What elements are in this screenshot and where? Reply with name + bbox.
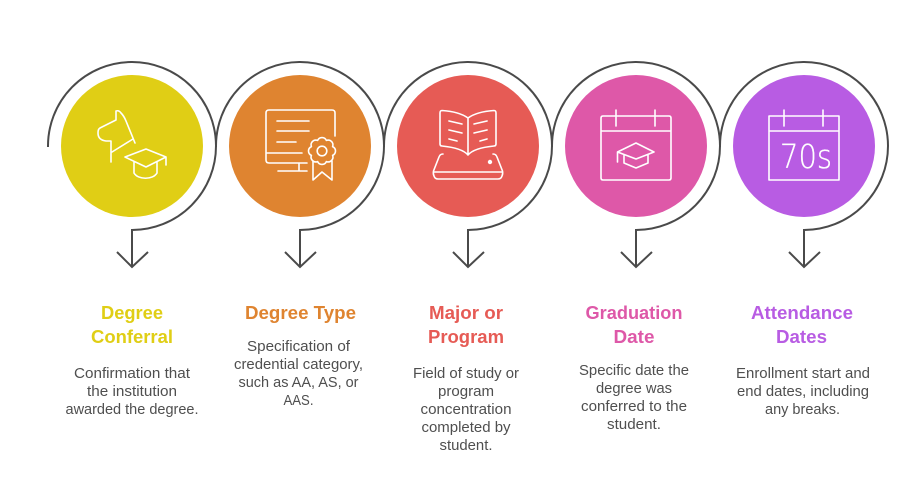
text: graduation date description: conferred to the <box>581 399 687 415</box>
arrow: circular connector <box>216 62 384 267</box>
text: attendance dates description: any breaks. <box>765 402 840 418</box>
panel: attendance dates <box>720 62 888 418</box>
text: graduation date description: degree was <box>596 381 672 397</box>
arrow: circular connector <box>552 62 720 267</box>
circle: red <box>397 75 539 217</box>
text: graduation date description: Specific date the <box>579 363 689 379</box>
panel: degree conferral <box>48 62 216 418</box>
heading: degree conferral: Degree <box>101 302 163 323</box>
text: major or program description: student. <box>440 438 492 454</box>
heading: degree conferral: Conferral <box>91 326 173 347</box>
text: degree conferral description: the institution <box>87 384 177 400</box>
icon: open book on scanner <box>433 110 503 179</box>
icon: certificate on monitor <box>266 110 335 180</box>
heading: graduation date: Graduation <box>586 302 682 323</box>
heading: degree type: Degree Type <box>245 302 356 323</box>
circle: orange <box>229 75 371 217</box>
text: graduation date description: student. <box>607 417 661 433</box>
text: major or program description: concentration <box>420 402 512 418</box>
circle: yellow <box>61 75 203 217</box>
text: degree type description: credential category, <box>234 357 363 373</box>
icon: horse head and graduation cap <box>98 111 166 178</box>
text: degree type description: AAS. <box>284 393 314 409</box>
icon: calendar with graduation cap <box>601 110 671 180</box>
text: degree conferral description: Confirmation that <box>74 366 190 382</box>
arrow: circular connector <box>48 62 216 267</box>
panel: graduation date <box>552 62 720 433</box>
text: attendance dates description: end dates, including <box>737 384 869 400</box>
heading: major or program: Program <box>428 326 504 347</box>
circle: pink <box>565 75 707 217</box>
text: degree conferral description: awarded the degree. <box>66 402 198 418</box>
text: major or program description: completed by <box>422 420 511 436</box>
panel: major or program <box>384 62 552 454</box>
arrow: circular connector <box>720 62 888 267</box>
heading: major or program: Major or <box>429 302 503 323</box>
text: degree type description: such as AA, AS, or <box>238 375 359 391</box>
text: attendance dates description: Enrollment start and <box>736 366 870 382</box>
heading: attendance dates: Dates <box>776 326 827 347</box>
panel: degree type <box>216 62 384 409</box>
text: major or program description: program <box>438 384 494 400</box>
circle: purple <box>733 75 875 217</box>
icon: calendar with 70s <box>769 110 839 180</box>
text: major or program description: Field of study or <box>413 366 519 382</box>
arrow: circular connector <box>384 62 552 267</box>
text: degree type description: Specification of <box>247 339 351 355</box>
heading: graduation date: Date <box>614 326 654 347</box>
icon: calendar with 70s: 70s <box>780 137 832 176</box>
heading: attendance dates: Attendance <box>751 302 853 323</box>
